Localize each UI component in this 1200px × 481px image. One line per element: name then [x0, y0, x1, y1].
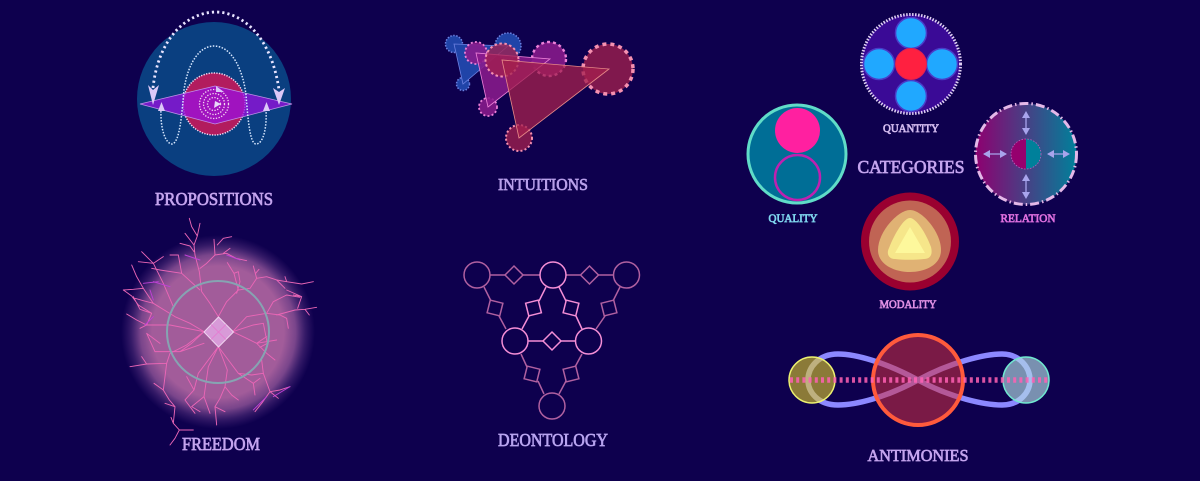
- panel: antimonies: [789, 335, 1049, 465]
- dotted axis: [790, 377, 1048, 383]
- quantity icon: [862, 14, 960, 114]
- categories heading: CATEGORIES: [858, 157, 964, 177]
- purple triangle group: [465, 42, 566, 116]
- left circle: [789, 357, 835, 403]
- diamond: [204, 317, 234, 347]
- label: FREEDOM: [182, 434, 260, 454]
- concentric dotted rings: [200, 90, 228, 118]
- modality icon: [861, 192, 959, 290]
- panel: intuitions: [446, 33, 633, 194]
- label: ANTIMONIES: [868, 446, 968, 465]
- panel: freedom: [121, 218, 317, 454]
- diamond: [140, 86, 292, 124]
- inner dotted wave: [161, 46, 266, 144]
- branching lines: [123, 218, 317, 445]
- top dotted arc: [153, 12, 279, 90]
- label: DEONTOLOGY: [498, 430, 608, 450]
- quality icon: [748, 105, 846, 203]
- label: INTUITIONS: [498, 175, 588, 194]
- label: PROPOSITIONS: [155, 189, 273, 209]
- arrowheads: [148, 85, 285, 111]
- red core: [183, 73, 245, 135]
- modality label: MODALITY: [880, 297, 937, 311]
- blue triangle group: [446, 33, 521, 90]
- right circle: [1003, 357, 1049, 403]
- panel: propositions: [137, 12, 292, 209]
- quantity label: QUANTITY: [883, 121, 939, 135]
- panel: deontology: [464, 262, 640, 450]
- panel: categories: [748, 14, 1076, 311]
- glow: [121, 235, 315, 429]
- red triangle group: [486, 44, 633, 151]
- infinity band: [808, 354, 1030, 405]
- relation label: RELATION: [1000, 211, 1056, 225]
- ring: [167, 281, 269, 383]
- bright links and nodes: [502, 262, 602, 354]
- relation icon: [976, 104, 1076, 204]
- dim links and nodes: [464, 262, 640, 419]
- sphere: [137, 22, 291, 176]
- central circle: [873, 335, 963, 425]
- quality label: QUALITY: [768, 211, 818, 225]
